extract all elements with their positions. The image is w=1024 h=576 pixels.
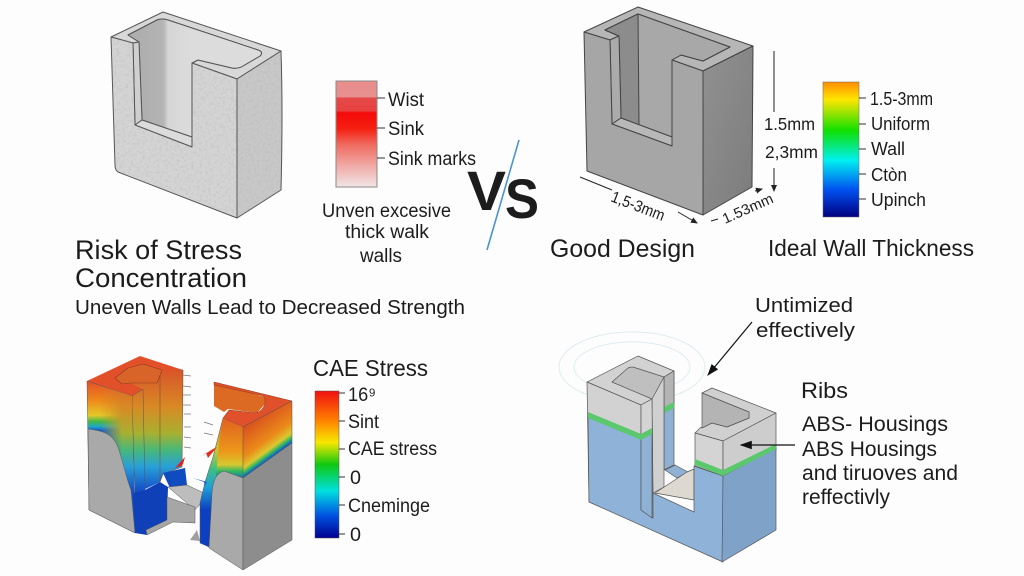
illustration: uniform wall housing <box>584 7 753 215</box>
legend: CAE colour scale: Sint <box>348 412 380 433</box>
text block: ribs description: and tiruoves and <box>802 462 958 485</box>
text block: ribs description: reffectivly <box>802 486 890 509</box>
panel: ribs <box>559 295 958 562</box>
legend: sink mark scale <box>336 81 476 187</box>
legend: CAE colour scale: 0 <box>350 525 361 546</box>
right block <box>200 382 292 570</box>
icon: airflow rings <box>559 332 705 402</box>
subheading: Uneven Walls Lead to Decreased Strength <box>75 297 465 319</box>
heading: risk of stress concentration: Concentration <box>75 263 247 293</box>
legend: thickness colour scale: Upinch <box>871 190 926 210</box>
heading: CAE stress: CAE Stress <box>313 355 428 381</box>
callout: uneven walls note: walls <box>359 246 402 267</box>
callout: uneven walls note <box>322 201 451 267</box>
versus badge: V <box>467 159 506 222</box>
left block <box>87 356 208 535</box>
text block: ribs description <box>802 413 958 509</box>
legend: thickness colour scale: Uniform <box>871 114 930 134</box>
dimension: width arrows and labels <box>580 177 776 228</box>
callout: uneven walls note: Unven excesive <box>322 201 451 222</box>
panel: CAE stress simulation <box>87 355 437 570</box>
text block: ribs description: ABS Housings <box>802 438 937 461</box>
callout: optimized note: Untimized <box>755 295 853 317</box>
legend: thickness colour scale: Ctòn <box>871 165 907 185</box>
heading: ribs: Ribs <box>801 378 848 403</box>
heading: good design: Good Design <box>550 235 695 263</box>
arrow: to rib <box>741 444 795 446</box>
legend: thickness colour scale: Wall <box>871 139 905 159</box>
dimension: height arrows and labels <box>764 51 818 191</box>
illustration: housing with ribs <box>587 356 776 562</box>
heading: ideal wall thickness: Ideal Wall Thickness <box>768 235 974 261</box>
panel: risk of stress concentration <box>75 12 476 319</box>
dimension: width arrows and labels: 1,5-3mm <box>609 189 667 225</box>
dimension: height arrows and labels: 2,3mm <box>765 142 818 162</box>
arrow: to top of housing <box>708 322 752 375</box>
centre floor <box>146 497 195 535</box>
callout: uneven walls note: thick walk <box>345 222 430 243</box>
heading: risk of stress concentration <box>75 235 247 293</box>
text block: ribs description: ABS- Housings <box>802 413 948 436</box>
legend: CAE colour scale: 0 <box>350 468 361 489</box>
callout: optimized note: effectively <box>756 320 855 342</box>
dimension: width arrows and labels: 1.53mm <box>720 191 776 228</box>
illustration: uneven thick-wall housing <box>105 12 285 225</box>
legend: CAE colour scale <box>315 385 437 546</box>
legend: thickness colour scale <box>823 82 933 217</box>
panel: good design <box>550 7 974 263</box>
heading: risk of stress concentration: Risk of Stress <box>75 235 242 265</box>
versus badge: S <box>505 167 539 230</box>
dimension: height arrows and labels: 1.5mm <box>764 114 815 134</box>
legend: CAE colour scale: 16⁹ <box>348 385 376 406</box>
legend: sink mark scale: Sink <box>388 119 424 140</box>
legend: sink mark scale: Wist <box>388 90 425 111</box>
legend: thickness colour scale: 1.5-3mm <box>870 89 933 109</box>
legend: CAE colour scale: Cneminge <box>348 496 430 517</box>
callout: optimized note <box>755 295 855 342</box>
legend: sink mark scale: Sink marks <box>388 149 476 170</box>
legend: CAE colour scale: CAE stress <box>348 439 437 460</box>
versus badge <box>467 140 539 250</box>
icon: stress arrows <box>175 375 217 486</box>
illustration: cut housing with stress map <box>87 356 292 570</box>
